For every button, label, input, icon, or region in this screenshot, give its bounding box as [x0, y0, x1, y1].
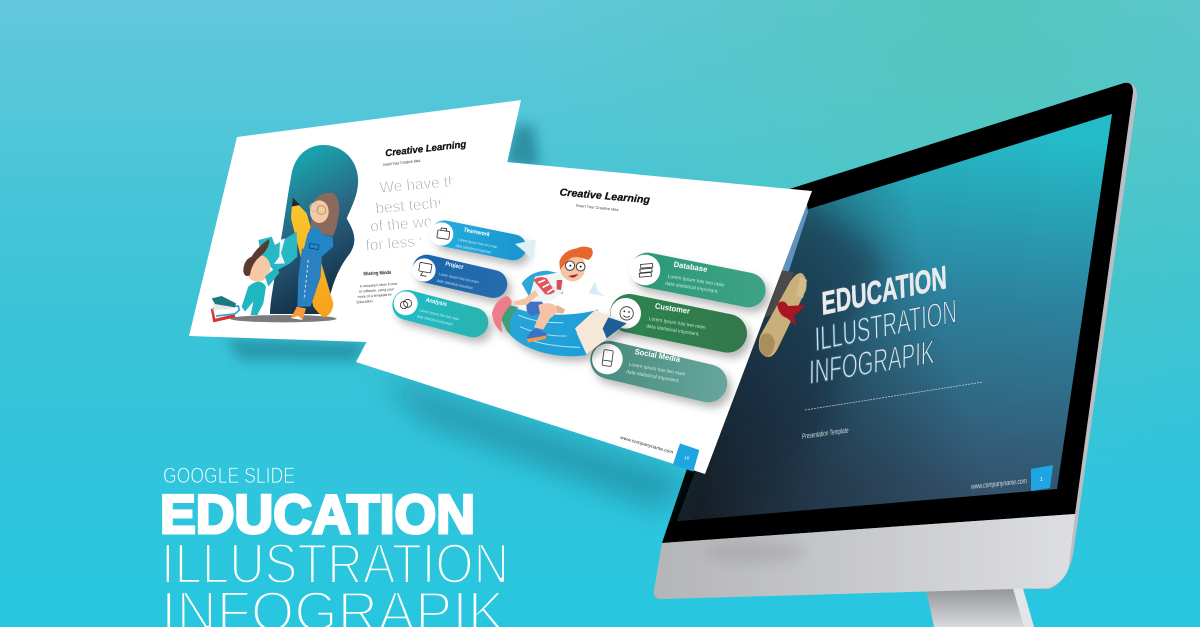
GOOGLE SLIDE label: GOOGLE SLIDE [163, 463, 295, 488]
pill: Social Media: data statistical important. [626, 369, 680, 384]
slide 1 subheading: Insert Your Creative Idea [383, 158, 421, 167]
monitor screen [677, 114, 1112, 521]
pill: Teamwork: Lorem Ipsum has two main [458, 238, 498, 249]
panel: slide 1 creative learning [189, 100, 521, 342]
slide 2 footer url: www.companyname.com [620, 435, 674, 455]
pill: Project: Lorem Ipsum has two main [438, 272, 479, 284]
screen title ILLUSTRATION: ILLUSTRATION [814, 293, 957, 359]
monitor stand [925, 585, 1034, 627]
slide 2 page number box: 16 [684, 455, 690, 461]
slide 1 heading: Creative Learning [385, 139, 467, 159]
illustration: boy riding pencil [513, 247, 593, 343]
ILLUSTRATION heading: ILLUSTRATION [161, 532, 509, 596]
icon: smartphone [602, 349, 613, 367]
pill: Database: Database [673, 260, 708, 274]
slide 2 heading: Creative Learning [559, 187, 651, 206]
pill: Customer: data statistical important. [646, 323, 700, 338]
slide 2 page number box [673, 443, 699, 472]
monitor [654, 82, 1137, 627]
icon: monitor [419, 262, 432, 276]
monitor chin [654, 514, 1075, 599]
icon: diploma scroll [759, 273, 807, 357]
text block: headline [160, 463, 509, 627]
panel: slide 2 creative learning [356, 158, 812, 474]
pill: Analysis [394, 291, 473, 327]
illustration blob background [270, 145, 358, 314]
slide shadow on chin [705, 540, 805, 564]
slide 1 large statement: best technology [375, 191, 484, 217]
slide 1 large statement: for less money [365, 229, 466, 255]
pill: Analysis: Lorem Ipsum has two main [419, 308, 460, 321]
pill: Database [630, 255, 748, 295]
pill: Analysis: Analysis [424, 297, 448, 308]
screen page number box [1031, 465, 1053, 491]
slide 1 paragraph: more of a template for [357, 293, 394, 299]
pill: Analysis: data statistical important. [416, 314, 454, 327]
slide 1 paragraph: or software, using your [359, 287, 395, 294]
screen subtitle: Presentation Template [802, 425, 849, 441]
slide shadows [225, 125, 690, 510]
slide 1 paragraph [356, 282, 398, 304]
pill: Project: data statistical important. [436, 279, 474, 290]
pill: Social Media: Social Media [634, 347, 681, 364]
illustration: boy with sheet [242, 232, 297, 315]
pill: Teamwork: Teamwork [463, 227, 491, 238]
slide 2 subheading: Insert Your Creative Idea [576, 203, 620, 212]
pill: Database: data statistical important. [665, 281, 719, 295]
floor shadow [230, 315, 337, 322]
pill: Database: Lorem Ipsum has two main [667, 274, 725, 289]
pill: Social Media [592, 344, 708, 384]
light blue reflection sliver and shadow on bezel [762, 195, 808, 318]
slide 1 small heading: Sharing Minds [363, 270, 392, 277]
ribbon [777, 301, 806, 326]
illustration: paper planes [515, 239, 605, 296]
slide 1 paragraph: Education [356, 299, 373, 304]
pill: Customer: Customer [654, 301, 691, 316]
slide 1 large statement: We have the [379, 172, 466, 197]
icon: smiley face [620, 307, 633, 320]
icon: server stack [639, 263, 653, 277]
pill: Project [412, 258, 493, 290]
slide 1 large statement: of the world [370, 212, 450, 236]
pill: Teamwork [430, 222, 513, 255]
monitor bezel [662, 83, 1133, 543]
icon: chart circles [400, 299, 412, 309]
pill: Teamwork: data statistical important. [455, 244, 493, 255]
pill: Project: Project [445, 261, 464, 271]
illustration: pencil [492, 296, 627, 356]
monitor silver rim [1030, 82, 1137, 589]
pill: Customer [610, 298, 728, 338]
illustration: books [211, 296, 239, 322]
EDUCATION heading: EDUCATION [160, 483, 475, 545]
pill: Customer: Lorem Ipsum has two main [648, 316, 706, 331]
illustration: large pencil [291, 197, 333, 317]
screen page number box: 1 [1040, 477, 1043, 483]
slide 1 paragraph: A company's ideas in new [360, 282, 398, 288]
screen footer url: www.companyname.com [970, 476, 1027, 491]
pill: Social Media: Lorem Ipsum has two main [628, 362, 686, 378]
screen title INFOGRAPIK: INFOGRAPIK [809, 334, 935, 392]
slide 1 large statement [365, 172, 484, 255]
screen title EDUCATION: EDUCATION [821, 259, 947, 322]
illustration: girl [291, 193, 339, 320]
icon: briefcase [437, 228, 450, 239]
